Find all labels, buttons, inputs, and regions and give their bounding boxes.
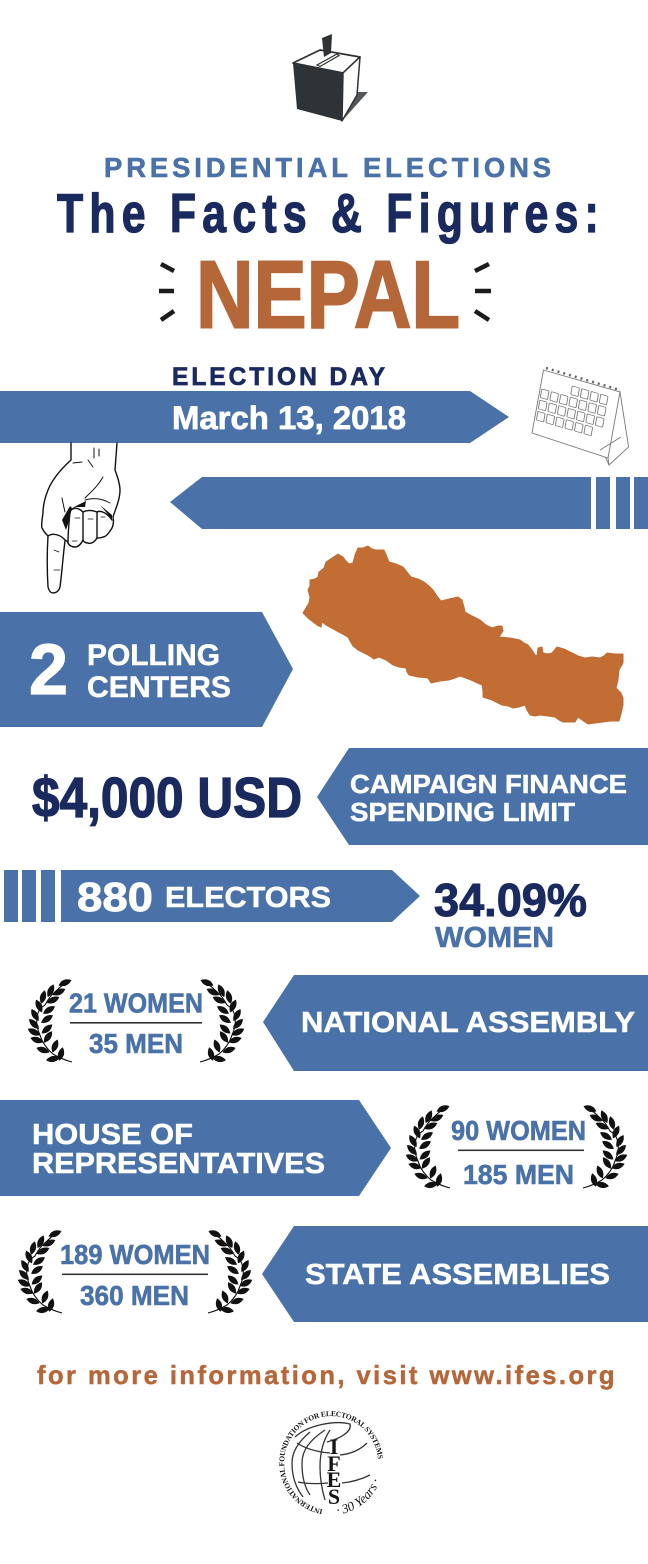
- figure: share of women electors: WOMEN: [435, 922, 554, 954]
- wreath: state assemblies counts: 189 WOMEN: [60, 1239, 210, 1270]
- banner: house of representatives: HOUSE OF: [32, 1119, 193, 1151]
- banner: polling centers: POLLING: [87, 639, 220, 672]
- icon: desk calendar: [532, 368, 629, 465]
- logo: IFES globe: · 30 Years ·: [337, 1480, 377, 1514]
- banner: campaign finance spending limit: [317, 748, 648, 845]
- wreath: national assembly counts: 35 MEN: [89, 1028, 183, 1059]
- wreath: state assemblies counts: 360 MEN: [80, 1280, 189, 1311]
- figure: share of women electors: 34.09%: [434, 874, 587, 926]
- wreath: state assemblies counts: [16, 1228, 254, 1314]
- logo: IFES globe: E: [327, 1467, 341, 1492]
- figure: campaign spending limit amount: $4,000 USD: [32, 766, 302, 830]
- icon: hand pointing down: [42, 443, 120, 593]
- banner: election date: [0, 391, 509, 443]
- banner: polling centers: [0, 612, 293, 727]
- subtitle: presidential elections: PRESIDENTIAL ELECTIONS: [104, 152, 555, 183]
- wreath: national assembly counts: [26, 977, 246, 1063]
- wreath: house of representatives counts: 185 MEN: [463, 1159, 574, 1190]
- banner: campaign finance spending limit: SPENDING LIMIT: [350, 797, 575, 827]
- banner: state assemblies: STATE ASSEMBLIES: [305, 1259, 610, 1291]
- banner: polling centers: 2: [29, 631, 68, 710]
- logo: IFES globe: I: [330, 1434, 338, 1459]
- icon: ballot box: [293, 34, 368, 121]
- banner: campaign finance spending limit: CAMPAIGN FINANCE: [350, 769, 627, 799]
- banner: election date: March 13, 2018: [172, 400, 406, 436]
- banner: electors: [4, 870, 420, 922]
- banner: national assembly: [263, 975, 648, 1071]
- banner: state assemblies: [262, 1226, 648, 1322]
- logo: IFES globe: INTERNATIONAL FOUNDATION FOR ELECTORAL SYSTEMS: [279, 1411, 383, 1514]
- logo: IFES globe: F: [327, 1451, 341, 1476]
- footer: more information link: for more information, visit www.ifes.org: [37, 1360, 617, 1390]
- label: election day: ELECTION DAY: [172, 363, 388, 391]
- banner: polling centers: CENTERS: [87, 671, 231, 704]
- wreath: house of representatives counts: 90 WOMEN: [451, 1115, 586, 1146]
- banner: electors: 880: [77, 874, 153, 920]
- icon: emphasis ticks around Nepal: [159, 264, 491, 320]
- banner: electors: ELECTORS: [165, 882, 331, 914]
- wreath: national assembly counts: 21 WOMEN: [69, 988, 203, 1018]
- logo: IFES globe: S: [328, 1484, 340, 1509]
- banner: house of representatives: [0, 1100, 391, 1196]
- wreath: house of representatives counts: [404, 1103, 629, 1190]
- banner: national assembly: NATIONAL ASSEMBLY: [301, 1007, 635, 1039]
- banner: house of representatives: REPRESENTATIVES: [32, 1148, 325, 1180]
- title: Nepal: NEPAL: [196, 242, 460, 348]
- map of Nepal: [303, 546, 623, 724]
- figure: share of women electors: [434, 874, 587, 954]
- empty banner with stripes: [170, 477, 648, 529]
